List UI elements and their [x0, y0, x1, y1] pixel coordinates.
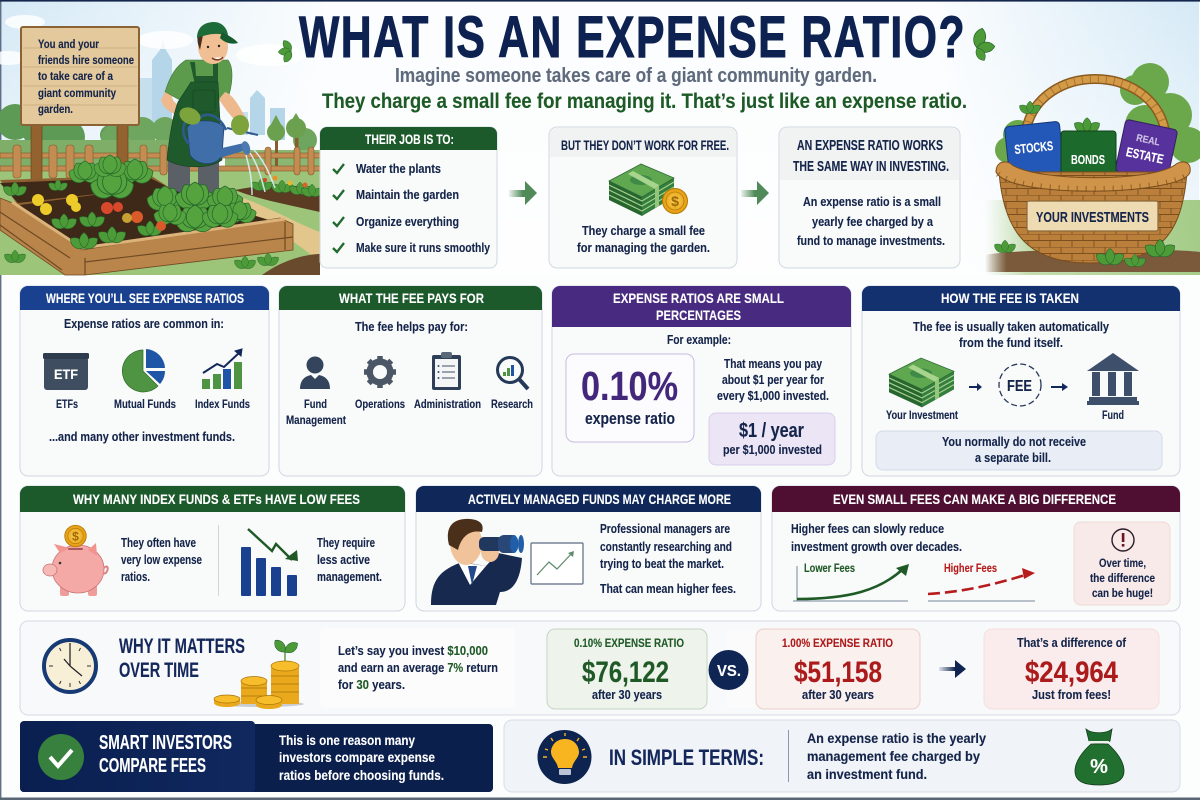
panel: what the fee pays for: The fee helps pay for: [355, 319, 468, 334]
panel: where you'll see expense ratios: ...and many other investment funds. [49, 429, 235, 444]
callout: 0.10% expense ratio: 0.10% [581, 363, 678, 409]
panel: why it matters over time [20, 621, 1180, 715]
panel: expense ratios are small percentages: EXPENSE RATIOS ARE SMALL [613, 290, 784, 306]
callout: no separate bill [876, 431, 1162, 470]
chart: lower fees [793, 563, 909, 601]
flower patch [235, 176, 325, 212]
panel: same way in investing: AN EXPENSE RATIO WORKS [797, 138, 943, 154]
background trees [0, 104, 120, 154]
sign board: You and your [38, 39, 99, 51]
panel: how the fee is taken [862, 286, 1180, 476]
callout: 0.10% result: 0.10% EXPENSE RATIO [574, 636, 684, 650]
icon: cash [889, 358, 954, 407]
panel: even small fees [772, 486, 1180, 611]
icon: clock [44, 640, 96, 692]
panel: actively managed funds: Professional managers are [600, 522, 730, 536]
icon: manager with binoculars [431, 519, 524, 605]
panel: in simple terms: IN SIMPLE TERMS: [609, 745, 764, 770]
arrow: fee to fund [1051, 383, 1068, 391]
panel: where you'll see expense ratios [20, 286, 269, 476]
panel: not for free: for managing the garden. [577, 241, 710, 255]
bonds card: BONDS [1071, 152, 1105, 167]
icon: index chart [202, 349, 242, 389]
icon: magnifier [498, 358, 528, 389]
panel: how the fee is taken: HOW THE FEE IS TAKEN [941, 290, 1079, 306]
icon: clipboard [432, 352, 461, 390]
text: investment period: for 30 years. [338, 677, 405, 692]
panel: why it matters over time: OVER TIME [119, 659, 199, 682]
panel: how the fee is taken: Your Investment [886, 410, 958, 422]
panel: why index funds have low fees: They often have [121, 536, 196, 550]
callout: 0.10% expense ratio [566, 354, 694, 442]
callout: one dollar per year: $1 / year [739, 420, 804, 442]
panel: their job: Maintain the garden [356, 188, 459, 202]
panel: their job: THEIR JOB IS TO: [365, 131, 454, 147]
panel: actively managed funds [416, 486, 761, 611]
icon: ETF [43, 353, 89, 390]
panel: how the fee is taken: The fee is usually taken automatically [913, 320, 1109, 334]
gardener [161, 22, 275, 200]
panel: same way in investing: fund to manage investments. [797, 233, 945, 248]
tagline: They charge a small fee for managing it. That’s just like an expense ratio. [322, 90, 967, 113]
stocks card: STOCKS [1014, 138, 1054, 157]
panel: what the fee pays for: Research [491, 399, 533, 411]
sign board: friends hire someone [38, 55, 134, 67]
fence [0, 145, 320, 178]
panel: actively managed funds: constantly researching and [600, 540, 732, 554]
panel: why index funds have low fees: very low expense [121, 553, 202, 567]
panel: why it matters over time: WHY IT MATTERS [119, 635, 245, 658]
estate card: ESTATE [1125, 144, 1165, 167]
panel: what the fee pays for [279, 286, 542, 476]
icon: piggy bank: $ [72, 529, 79, 543]
panel: why index funds have low fees: They require [317, 536, 375, 550]
panel: in simple terms: management fee charged by [807, 748, 980, 764]
icon: bank [1087, 353, 1139, 405]
panel: their job: Organize everything [356, 215, 459, 229]
arrow: to difference [939, 660, 966, 678]
panel: expense ratios are small percentages: That means you pay [724, 357, 822, 371]
panel: where you'll see expense ratios: Index Funds [195, 399, 250, 411]
icon: right title leaves [971, 27, 995, 63]
chart: higher fees [928, 563, 1035, 601]
callout: 1.00% result: $51,158 [794, 656, 882, 689]
callout: difference: Just from fees! [1032, 688, 1111, 702]
panel: same way in investing: An expense ratio is a small [803, 194, 941, 209]
title: WHAT IS AN EXPENSE RATIO? [299, 5, 966, 70]
panel: expense ratios are small percentages: about $1 per year for [722, 373, 824, 387]
estate card [1115, 119, 1178, 182]
water [246, 150, 275, 195]
panel: same way in investing: THE SAME WAY IN INVESTING. [793, 159, 949, 175]
panel: even small fees: EVEN SMALL FEES CAN MAKE A BIG DIFFERENCE [833, 491, 1116, 507]
icon: ETF: ETF [54, 366, 78, 382]
callout: difference: That’s a difference of [1017, 636, 1127, 650]
panel: smart investors: This is one reason many [279, 733, 415, 748]
panel: why index funds have low fees: management. [317, 570, 382, 584]
callout: one dollar per year: per $1,000 invested [723, 443, 822, 457]
stocks card [1004, 121, 1065, 180]
panel: what the fee pays for: Administration [414, 399, 481, 411]
callout: 0.10% result: $76,122 [582, 656, 669, 689]
your investments sign [1027, 201, 1158, 231]
callout: 0.10% expense ratio: expense ratio [585, 409, 675, 428]
panel: smart investors [20, 721, 493, 792]
panel: even small fees: investment growth over decades. [791, 539, 962, 554]
your investments sign: YOUR INVESTMENTS [1036, 209, 1149, 226]
panel: where you'll see expense ratios: WHERE YOU’LL SEE EXPENSE RATIOS [46, 290, 244, 306]
panel: what the fee pays for: Operations [355, 399, 405, 411]
icon: piggy bank [43, 525, 108, 596]
icon: fee circle [999, 364, 1041, 406]
panel: their job: Make sure it runs smoothly [356, 241, 490, 255]
callout: difference can be huge [1074, 522, 1170, 605]
panel: actively managed funds: ACTIVELY MANAGED FUNDS MAY CHARGE MORE [468, 491, 731, 507]
chart: higher fees: Higher Fees [944, 563, 997, 575]
callout: difference can be huge: the difference [1090, 573, 1155, 585]
sign posts [31, 125, 42, 185]
panel: what the fee pays for: Management [286, 415, 346, 427]
callout: no separate bill: You normally do not receive [942, 435, 1086, 449]
panel: why index funds have low fees: WHY MANY INDEX FUNDS & ETFs HAVE LOW FEES [73, 491, 360, 507]
callout: difference [984, 629, 1159, 709]
panel: in simple terms: An expense ratio is the yearly [807, 730, 986, 746]
gloves [177, 104, 203, 128]
panel: expense ratios are small percentages: For example: [667, 333, 731, 347]
clouds [0, 15, 304, 66]
panel: where you'll see expense ratios: Expense ratios are common in: [64, 316, 224, 331]
subtitle: Imagine someone takes care of a giant community garden. [395, 65, 877, 87]
panel: same way in investing: yearly fee charged by a [812, 214, 934, 229]
panel: actively managed funds: That can mean higher fees. [600, 582, 736, 596]
panel: same way in investing [779, 127, 960, 268]
callout: 1.00% result: after 30 years [802, 688, 874, 702]
panel: how the fee is taken: Fund [1102, 410, 1124, 422]
badge: vs [708, 650, 748, 690]
panel: expense ratios are small percentages: PERCENTAGES [656, 307, 741, 323]
illustration: community garden with gardener [0, 15, 325, 275]
callout: one dollar per year [709, 413, 835, 465]
text: investment return: and earn an average 7% return [338, 660, 498, 675]
text: investment scenario: Let’s say you invest $10,000 [338, 643, 488, 658]
callout: no separate bill: a separate bill. [975, 451, 1051, 465]
icon: pie chart [122, 349, 165, 392]
panel: expense ratios are small percentages [552, 286, 851, 476]
panel: not for free: $ [671, 193, 679, 209]
panel: how the fee is taken: from the fund itself. [959, 336, 1063, 350]
panel: why index funds have low fees: less active [317, 553, 370, 567]
panel: even small fees: Higher fees can slowly reduce [791, 521, 944, 536]
icon: money bag [1075, 729, 1124, 785]
icon: coins and sprout [214, 637, 304, 709]
panel: what the fee pays for: Fund [304, 399, 327, 411]
panel: their job [320, 127, 497, 268]
callout: 1.00% result: 1.00% EXPENSE RATIO [782, 636, 893, 650]
callout: difference can be huge: Over time, [1099, 558, 1146, 570]
small trees [267, 113, 306, 170]
callout: difference can be huge: can be huge! [1092, 588, 1153, 600]
panel: actively managed funds: trying to beat the market. [600, 557, 724, 571]
panel: smart investors: investors compare expense [279, 750, 435, 765]
callout: 0.10% result: after 30 years [592, 688, 662, 702]
panel: in simple terms: an investment fund. [807, 766, 927, 782]
icon: money bag: % [1090, 756, 1108, 778]
bonds card [1061, 131, 1116, 180]
icon: person [300, 356, 330, 389]
callout: 0.10% result [547, 629, 707, 709]
panel: not for free [549, 127, 737, 268]
panel: why index funds have low fees: ratios. [121, 570, 150, 584]
panel: where you'll see expense ratios: ETFs [56, 399, 78, 411]
badge: vs: VS. [717, 663, 741, 680]
arrow: job to fee [509, 181, 537, 205]
arrow: fee to definition [741, 181, 769, 205]
callout: difference: $24,964 [1025, 656, 1118, 689]
panel: why index funds have low fees [20, 486, 405, 611]
icon: left title leaves [278, 38, 294, 64]
panel: their job: Water the plants [356, 162, 441, 176]
sign board: to take care of a [38, 71, 114, 83]
panel: smart investors: ratios before choosing funds. [279, 768, 444, 783]
icon: chart screen [531, 543, 583, 584]
watering can [187, 121, 224, 164]
sign board [21, 27, 139, 125]
panel: not for free: They charge a small fee [582, 224, 705, 238]
icon: fee circle: FEE [1007, 378, 1032, 395]
icon: check badge [38, 734, 84, 780]
grass [0, 170, 320, 275]
panel: smart investors: SMART INVESTORS [99, 732, 232, 754]
chart: lower fees: Lower Fees [804, 563, 855, 575]
panel: smart investors: COMPARE FEES [99, 755, 206, 777]
panel: in simple terms [504, 720, 1180, 792]
sign board: giant community [38, 88, 117, 100]
panel: not for free: BUT THEY DON’T WORK FOR FREE. [561, 138, 729, 153]
skyline [140, 40, 285, 140]
panel: what the fee pays for: WHAT THE FEE PAYS FOR [339, 290, 484, 306]
arrow: cash to fee [969, 383, 982, 391]
estate card: REAL [1135, 133, 1161, 149]
sign board: garden. [38, 104, 73, 116]
illustration: investment basket [985, 63, 1200, 275]
callout: 1.00% result [756, 629, 920, 709]
panel: where you'll see expense ratios: Mutual Funds [114, 399, 176, 411]
icon: declining bars [241, 529, 298, 596]
raised garden bed [0, 154, 293, 275]
panel: expense ratios are small percentages: every $1,000 invested. [717, 389, 829, 403]
icon: light bulb [538, 730, 592, 784]
plants [67, 160, 103, 185]
icon: gear [364, 356, 396, 388]
